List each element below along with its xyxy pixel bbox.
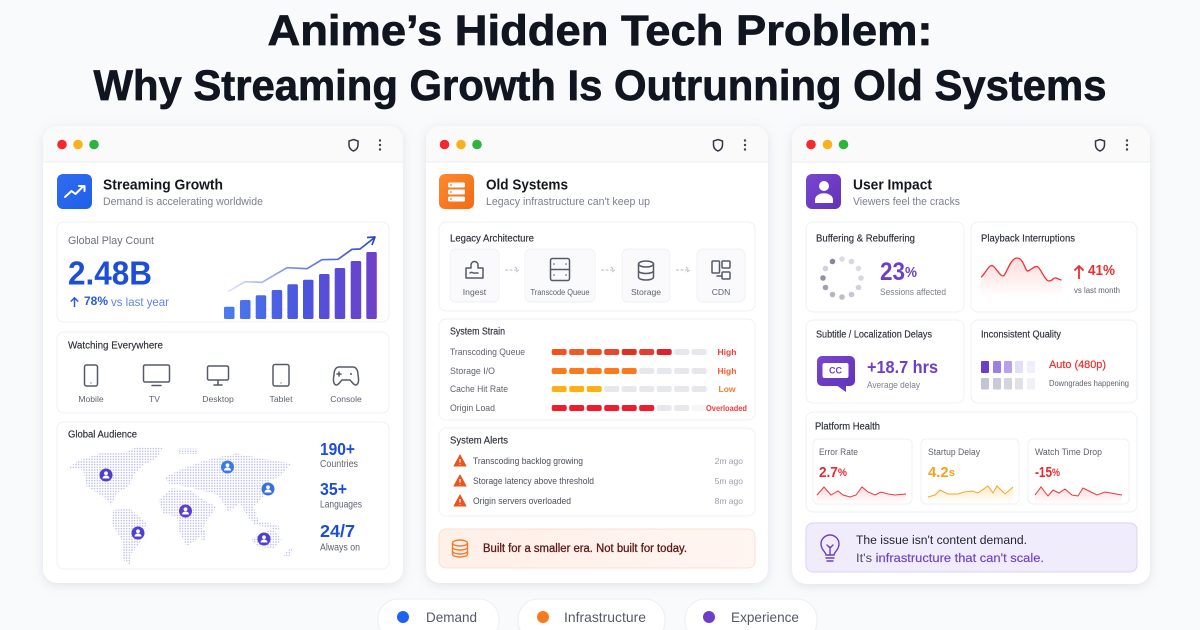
metric: watch time drop: Watch Time Drop (1035, 447, 1102, 457)
metric: watch time drop (1028, 439, 1129, 504)
legend item: experience: Experience (731, 609, 799, 625)
alert 1 (454, 455, 743, 466)
subheading: Demand is accelerating worldwide (103, 196, 263, 208)
panel: buffering: Sessions affected (880, 287, 946, 297)
value: 41% (1088, 263, 1115, 279)
panel: playback interruptions: vs last month (1074, 285, 1120, 295)
row: storage I/O: High (718, 366, 736, 376)
quality squares (981, 361, 1035, 390)
row: transcoding queue: High (718, 347, 736, 357)
panel: playback interruptions: Playback Interruptions (981, 234, 1075, 244)
icon: desktop (202, 366, 234, 404)
step: transcode queue (525, 249, 595, 302)
alert 2: Storage latency above threshold (473, 476, 594, 486)
icon: TV (144, 365, 170, 404)
window bar (426, 126, 768, 162)
window bar (792, 126, 1150, 162)
legend item: demand (378, 599, 499, 630)
icon: server (439, 174, 474, 209)
callout: built for a smaller era (439, 529, 755, 568)
row: transcoding queue: Transcoding Queue (450, 347, 525, 357)
window bar (43, 126, 403, 162)
panel: subtitle delays: Average delay (867, 380, 920, 390)
panel: system strain: System Strain (450, 326, 505, 338)
legend (378, 599, 817, 630)
audience stats: 24/7 (320, 521, 355, 541)
panel: system strain (439, 319, 755, 420)
icon: loading spinner (820, 256, 864, 300)
title (94, 7, 1106, 110)
legend item: infrastructure: Infrastructure (564, 609, 646, 625)
icon: console (330, 367, 362, 404)
subheading: Viewers feel the cracks (853, 196, 961, 208)
step: CDN (697, 249, 745, 302)
row: cache hit rate: Low (718, 384, 736, 394)
row: origin load: Origin Load (450, 403, 495, 413)
row: origin load: Overloaded (706, 403, 747, 413)
panel: global play count (57, 222, 389, 322)
icon: closed captions (817, 356, 855, 392)
audience stats: Languages (320, 500, 362, 510)
growth note: 78% (84, 296, 108, 308)
alert 2 (454, 475, 743, 486)
legend item: demand: Demand (426, 609, 477, 625)
metric: startup delay: 4.2s (928, 465, 955, 481)
step: CDN: CDN (712, 287, 730, 297)
audience stats (320, 439, 362, 554)
alert 1: 2m ago (715, 456, 743, 466)
growth note: vs last year (111, 295, 169, 309)
value: 23% (880, 258, 917, 286)
icon: trending up (57, 174, 92, 209)
metric: startup delay: Startup Delay (928, 447, 980, 457)
panel: legacy architecture (439, 222, 755, 311)
panel: buffering (806, 222, 964, 312)
step: transcode queue: Transcode Queue (530, 287, 590, 297)
row: storage I/O: Storage I/O (450, 366, 495, 376)
alert 3: Origin servers overloaded (473, 496, 571, 506)
panel: Old Systems (426, 126, 768, 583)
alert 2: 5m ago (715, 476, 743, 486)
callout: infrastructure insight: The issue isn't content demand. (856, 533, 1027, 547)
value: +18.7 hrs (867, 357, 938, 377)
panel: playback interruptions (971, 222, 1137, 312)
arrow (676, 267, 690, 273)
heading: Streaming Growth (103, 176, 223, 194)
big number: 2.48B (68, 254, 152, 292)
panel: Streaming Growth (43, 126, 403, 583)
line chart (981, 258, 1062, 297)
callout: infrastructure insight (806, 523, 1137, 572)
panel: platform health: Platform Health (815, 422, 880, 432)
panel: User Impact (792, 126, 1150, 584)
panel: watching everywhere (57, 332, 389, 413)
alert 3: 8m ago (715, 496, 743, 506)
audience stats: Always on (320, 542, 360, 554)
panel: subtitle delays (806, 320, 964, 403)
panel: inconsistent quality: Downgrades happening (1049, 378, 1129, 388)
trend line (228, 237, 375, 292)
icon: mobile (78, 365, 104, 404)
dotted world map (64, 447, 293, 565)
icon: console: Console (330, 394, 362, 404)
audience stats: 35+ (320, 479, 347, 499)
alert 1: Transcoding backlog growing (473, 456, 583, 466)
panel: system alerts (439, 428, 755, 516)
panel: watching everywhere: Watching Everywhere (68, 340, 163, 352)
metric: startup delay (921, 439, 1019, 504)
title: Anime’s Hidden Tech Problem: (268, 7, 932, 55)
legend item: infrastructure (518, 599, 665, 630)
subheading: Legacy infrastructure can't keep up (486, 196, 650, 208)
step: ingest: Ingest (463, 287, 487, 297)
audience stats: 190+ (320, 439, 355, 459)
icon: tablet: Tablet (270, 394, 293, 404)
audience stats: Countries (320, 459, 358, 470)
row: transcoding queue (450, 347, 736, 357)
heading: Old Systems (486, 176, 568, 194)
panel: inconsistent quality (971, 320, 1137, 403)
arrow (601, 267, 614, 273)
value: Auto (480p) (1049, 359, 1106, 371)
panel: global play count: Global Play Count (68, 235, 154, 247)
row: cache hit rate (450, 384, 736, 394)
legend item: experience (685, 599, 817, 630)
panel: global audience: Global Audience (68, 430, 137, 440)
panel: global audience (57, 422, 389, 569)
metric: error rate (813, 439, 912, 504)
step: storage: Storage (631, 287, 661, 297)
icon: user (806, 174, 841, 209)
row: cache hit rate: Cache Hit Rate (450, 384, 508, 394)
icon: closed captions: CC (829, 366, 842, 376)
metric: watch time drop: -15% (1035, 465, 1060, 481)
panel: subtitle delays: Subtitle / Localization Delays (816, 330, 932, 340)
alert 3 (454, 495, 743, 506)
row: origin load (450, 403, 747, 413)
icon: mobile: Mobile (78, 394, 104, 404)
icon: tablet (270, 364, 293, 404)
step: ingest (450, 249, 499, 302)
map pins (100, 460, 274, 546)
panel: legacy architecture: Legacy Architecture (450, 234, 534, 244)
metric: error rate: Error Rate (819, 447, 858, 457)
icon: light bulb (821, 535, 839, 561)
panel: buffering: Buffering & Rebuffering (816, 234, 915, 244)
callout: built for a smaller era: Built for a smaller era. Not built for today. (483, 543, 687, 555)
callout: infrastructure insight: It's infrastructure that can't scale. (856, 551, 1044, 565)
value (1074, 263, 1115, 279)
growth note (71, 295, 169, 309)
icon: TV: TV (149, 394, 160, 404)
step: storage (622, 249, 670, 302)
icon: desktop: Desktop (202, 394, 234, 404)
panel: platform health (806, 412, 1137, 512)
metric: error rate: 2.7% (819, 465, 847, 481)
panel: system alerts: System Alerts (450, 436, 508, 446)
arrow (505, 267, 518, 273)
heading: User Impact (853, 176, 932, 194)
title: Why Streaming Growth Is Outrunning Old Systems (94, 62, 1106, 110)
row: storage I/O (450, 366, 736, 376)
panel: inconsistent quality: Inconsistent Quality (981, 330, 1061, 340)
bar chart (224, 252, 377, 319)
